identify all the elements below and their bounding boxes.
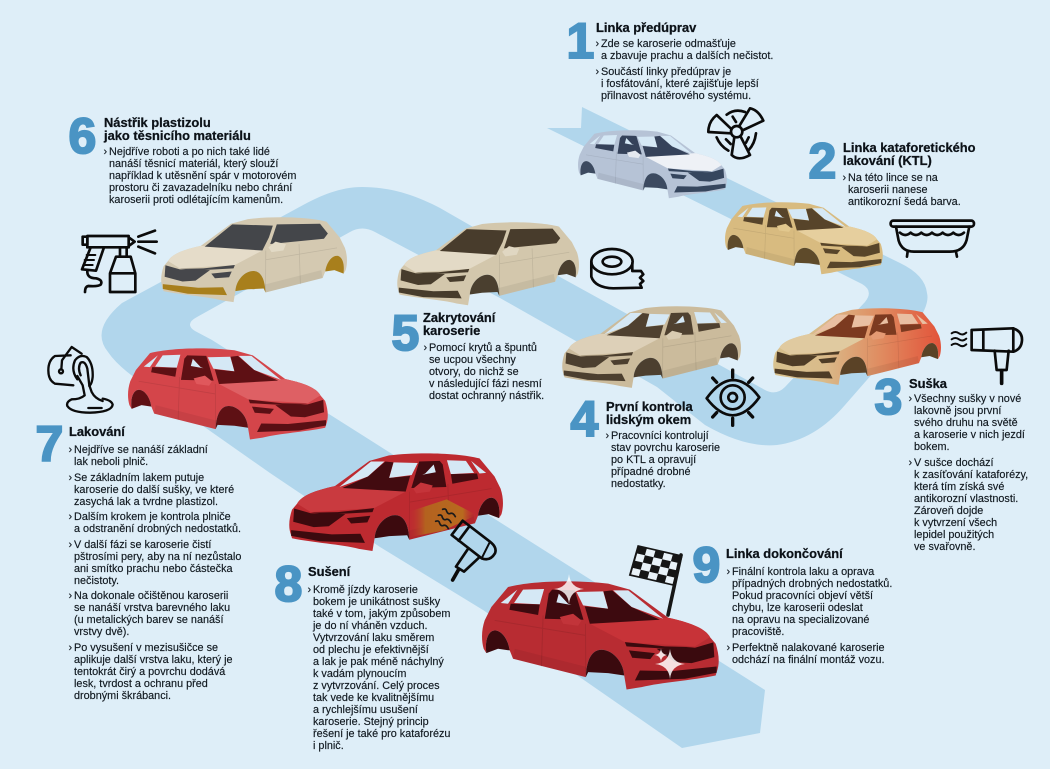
icon: hair dryer — [952, 328, 1022, 383]
icon: fan — [708, 108, 763, 158]
number 4: 4 — [570, 391, 598, 447]
text 7: Na dokonale očištěnou karoserii — [74, 590, 228, 602]
text 6: Nejdříve roboti a po nich také lidé — [109, 146, 270, 158]
text 6: nanáší těsnicí materiál, který slouží — [109, 158, 278, 170]
text 7: aplikuje další vrstva laku, který je — [74, 654, 233, 666]
conveyor ribbon path — [102, 107, 927, 748]
text 1: Součástí linky předúprav je — [601, 66, 731, 78]
text 3: lepidel použitých — [914, 528, 994, 540]
text 3: svého druhu na světě — [914, 417, 1018, 429]
text 7: zasychá lak a tvrdne plastizol. — [74, 496, 218, 508]
heading 5 — [423, 310, 496, 338]
text 3: Všechny sušky v nové — [914, 393, 1021, 405]
heading 7: Lakování — [69, 424, 125, 439]
text 5: otvory, do nichž se — [429, 366, 519, 378]
text 5: Pomocí krytů a špuntů — [429, 342, 537, 354]
heading 2: lakování (KTL) — [843, 153, 932, 168]
text 3 — [908, 393, 1028, 552]
number 2: 2 — [808, 133, 836, 189]
text 7: lesk, tvrdost a ochranu před — [74, 678, 208, 690]
text 4: stav povrchu karoserie — [611, 442, 720, 454]
sparkle on roof — [554, 574, 584, 604]
text 6: karoserii proti odlétajícím kamenům. — [109, 194, 283, 206]
heading 4: lidským okem — [606, 412, 691, 427]
text 7: V další fázi se karoserie čistí — [74, 538, 211, 550]
text 8: Kromě jízdy karoserie — [313, 584, 418, 596]
panel: step 5 — [392, 305, 544, 402]
text 4: Pracovníci kontrolují — [611, 430, 709, 442]
text 7: lak neboli plnič. — [74, 456, 148, 468]
number 8: 8 — [274, 556, 302, 612]
text 5: v následující fázi nesmí — [429, 378, 542, 390]
text 8: z vytvrzování. Celý proces — [313, 680, 440, 692]
text 9: Finální kontrola laku a oprava — [732, 566, 874, 578]
heading 8: Sušení — [308, 564, 350, 579]
text 3: a karoserie v nich jezdí — [914, 429, 1025, 441]
text 8: řešení je také pro kataforézu — [313, 728, 450, 740]
icon: paint bucket — [48, 347, 113, 413]
text 5: dostat ochranný nástřik. — [429, 390, 544, 402]
text 9: chybu, lze karoserii odeslat — [732, 602, 863, 614]
car 6: plastisol body — [161, 217, 347, 302]
heading 3: Suška — [909, 376, 947, 391]
heading 2: Linka kataforetického — [843, 140, 976, 155]
text 2: karoserii nanese — [848, 184, 928, 196]
text 3: k vytvrzení všech — [914, 516, 997, 528]
car 4: inspected body — [562, 306, 741, 388]
text 2: antikorozní šedá barva. — [848, 196, 961, 208]
text 4: případné drobné — [611, 466, 691, 478]
text 5: se ucpou všechny — [429, 354, 516, 366]
text 6: například k utěsnění spár v motorovém — [109, 170, 296, 182]
text 1: i fosfátování, které zajišťuje lepší — [601, 78, 759, 90]
text 9: Perfektně nalakované karoserie — [732, 642, 885, 654]
text 1 — [596, 38, 773, 102]
heading 5: Zakrytování — [423, 310, 495, 325]
text 7: tentokrát čirý a povrchu dodává — [74, 666, 225, 678]
panel: step 6 — [68, 108, 296, 206]
heading 2 — [843, 140, 976, 168]
number 6: 6 — [68, 108, 96, 164]
car 3: drying body — [773, 308, 941, 385]
car 1: silver body — [578, 130, 727, 198]
heading 6: jako těsnicího materiálu — [104, 128, 251, 143]
text 8: od plechu je efektivnější — [313, 644, 429, 656]
car 8: drying body — [289, 453, 503, 551]
panel: step 7 — [36, 416, 241, 702]
icon: bathtub — [891, 221, 974, 257]
text 8: k vadám plynoucím — [313, 668, 406, 680]
icon: hair dryer aimed at car — [452, 521, 496, 580]
sparkle on grille large — [655, 649, 685, 679]
heading 6 — [104, 115, 251, 143]
text 8: je do ní vháněn vzduch. — [313, 620, 428, 632]
number 1: 1 — [566, 13, 594, 69]
car 2: coated body — [725, 202, 883, 274]
number 3: 3 — [874, 369, 902, 425]
icon: spray gun — [82, 231, 157, 292]
text 6 — [104, 146, 296, 206]
text 8: a rychlejšímu usušení — [313, 704, 418, 716]
text 3: bokem. — [914, 441, 950, 453]
text 7: Se základním lakem putuje — [74, 472, 204, 484]
heated door panel — [408, 499, 477, 537]
text 3: k zasíťování kataforézy, — [914, 468, 1028, 480]
text 8 — [308, 584, 450, 752]
icon: tape roll — [591, 249, 643, 288]
text 7: a odstranění drobných nedostatků. — [74, 523, 241, 535]
text 1: a zbavuje prachu a dalších nečistot. — [601, 50, 773, 62]
panel: step 3 — [874, 369, 1028, 552]
text 5 — [424, 342, 544, 402]
car 7: painted body — [128, 348, 328, 440]
text 9: odchází na finální montáž vozu. — [732, 654, 885, 666]
sparkle on grille small — [654, 648, 668, 662]
text 8: tak vede ke kvalitnějšímu — [313, 692, 434, 704]
text 7: se nanáší vrstva barevného laku — [74, 602, 230, 614]
text 9: případných drobných nedostatků. — [732, 578, 892, 590]
text 7: pštrosími pery, aby na ní nezůstalo — [74, 550, 241, 562]
heading 9: Linka dokončování — [726, 546, 843, 561]
text 7: Nejdříve se nanáší základní — [74, 444, 208, 456]
text 4: nedostatky. — [611, 478, 666, 490]
icon: eye — [707, 370, 759, 425]
text 3: ve svařovně. — [914, 540, 975, 552]
heading 4: První kontrola — [606, 399, 693, 414]
text 9: pracoviště. — [732, 626, 784, 638]
panel: step 2 — [808, 133, 976, 208]
number 7: 7 — [36, 416, 63, 472]
car 9: finished body — [482, 581, 719, 689]
text 9: na opravu na specializované — [732, 614, 869, 626]
text 1: přilnavost nátěrového systému. — [601, 90, 751, 102]
text 7: nečistoty. — [74, 574, 119, 586]
text 6: prostoru či zavazadelníku nebo chrání — [109, 182, 292, 194]
heading 1: Linka předúprav — [596, 20, 696, 35]
text 3: V sušce dochází — [914, 456, 994, 468]
text 7: drobnými škrábanci. — [74, 690, 171, 702]
text 4 — [606, 430, 720, 490]
text 8: i plnič. — [313, 740, 344, 752]
text 3: antikorozní vlastnosti. — [914, 492, 1018, 504]
text 7: (u metalických barev se nanáší — [74, 614, 223, 626]
heat waves on car 8 — [436, 509, 455, 529]
heading 4 — [606, 399, 693, 427]
text 8: bokem je unikátnost sušky — [313, 596, 440, 608]
text 4: po KTL a opravují — [611, 454, 696, 466]
panel: step 4 — [570, 391, 720, 490]
heading 6: Nástřik plastizolu — [104, 115, 211, 130]
panel: step 1 — [566, 13, 773, 102]
text 7: karoserie do další sušky, ve které — [74, 484, 234, 496]
number 9: 9 — [692, 537, 720, 593]
text 3: která tím získá své — [914, 480, 1004, 492]
text 3: lakovně jsou první — [914, 405, 1001, 417]
text 8: také v tom, jakým způsobem — [313, 608, 450, 620]
text 3: Zároveň dojde — [914, 504, 983, 516]
text 9 — [726, 566, 892, 666]
text 8: a lak je pak méně náchylný — [313, 656, 444, 668]
text 8: karoserie. Stejný princip — [313, 716, 429, 728]
text 2 — [842, 172, 961, 208]
icon: checkered flag — [630, 546, 682, 615]
text 7: Po vysušení v mezisušičce se — [74, 642, 218, 654]
text 7: ani smítko prachu nebo částečka — [74, 562, 233, 574]
heading 5: karoserie — [423, 323, 480, 338]
panel: step 9 — [692, 537, 892, 666]
text 1: Zde se karoserie odmašťuje — [601, 38, 736, 50]
text 7: Dalším krokem je kontrola plniče — [74, 511, 231, 523]
number 5: 5 — [392, 305, 419, 361]
text 7 — [68, 444, 241, 702]
text 7: vrstvy dvě). — [74, 626, 129, 638]
panel: step 8 — [274, 556, 450, 752]
text 8: Vytvrzování laku směrem — [313, 632, 434, 644]
car 5: covered body — [397, 222, 579, 305]
text 2: Na této lince se na — [848, 172, 938, 184]
text 9: Pokud pracovníci objeví větší — [732, 590, 873, 602]
